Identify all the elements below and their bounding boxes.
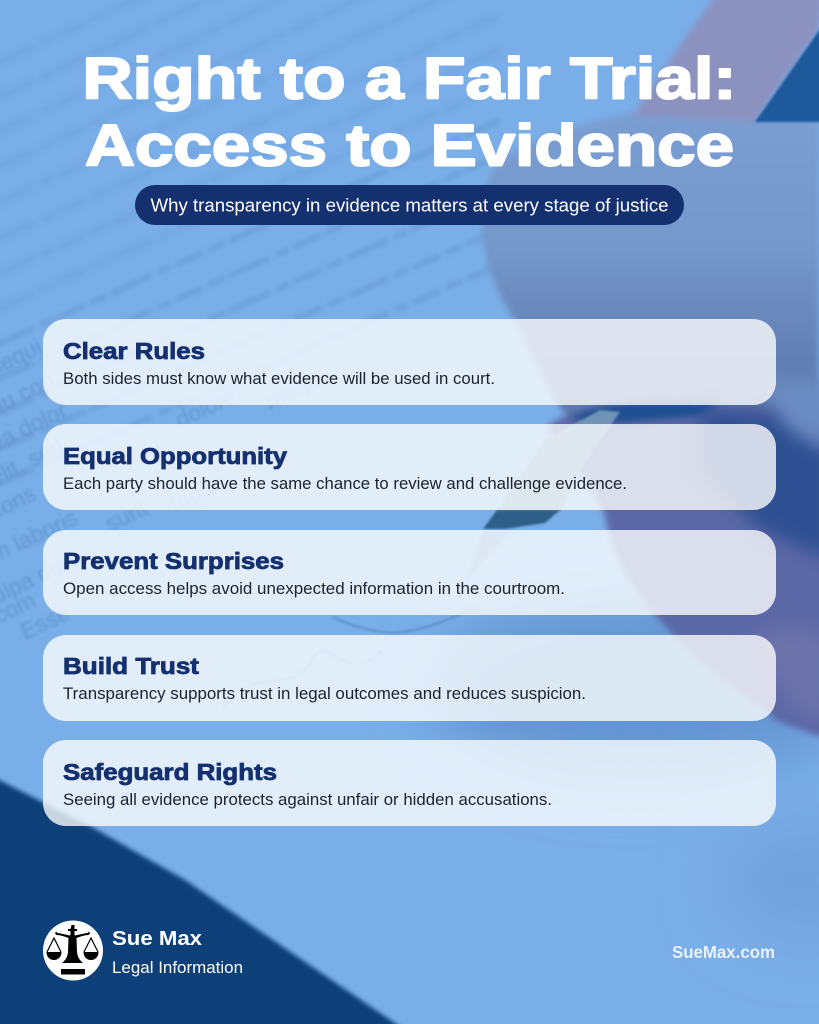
card: Build Trust [43, 635, 776, 721]
hand palm [482, 112, 819, 422]
card: Safeguard Rights: Seeing all evidence protects against unfair or hidden accusations. [63, 791, 552, 809]
pen tip [483, 510, 560, 529]
document text lines, near the pen [0, 333, 336, 645]
document text lines, near the pen: magna [261, 361, 336, 415]
card: Clear Rules: Both sides must know what evidence will be used in court. [63, 370, 495, 388]
brand name: Sue Max [112, 927, 203, 950]
card: Prevent Surprises: Open access helps avoid unexpected information in the courtroom. [63, 580, 565, 598]
finger [633, 0, 819, 122]
document text lines, near the pen: sunt [101, 494, 152, 537]
document text lines, near the pen: fugiat [166, 469, 229, 517]
card: Safeguard Rights [43, 740, 776, 826]
card: Clear Rules: Clear Rules [63, 338, 205, 364]
card: Equal Opportunity: Equal Opportunity [63, 443, 287, 469]
under-hand shadow [547, 402, 819, 740]
title: Access to Evidence [85, 114, 734, 178]
document text lines, near the pen: dolore [171, 382, 240, 433]
card: Equal Opportunity: Each party should have the same chance to review and challenge evidence. [63, 475, 627, 493]
document text lines, far and out of focus [0, 0, 500, 335]
card: Prevent Surprises: Prevent Surprises [63, 548, 284, 574]
subtitle pill: Why transparency in evidence matters at every stage of justice [150, 194, 668, 216]
card: Safeguard Rights: Safeguard Rights [63, 759, 277, 785]
signature [222, 606, 475, 712]
logo: scales of justice [43, 920, 103, 980]
title [82, 46, 736, 178]
card: Build Trust: Transparency supports trust in legal outcomes and reduces suspicion. [63, 685, 586, 703]
card: Equal Opportunity [43, 424, 776, 510]
website: SueMax.com [672, 942, 775, 962]
card: Build Trust: Build Trust [63, 653, 199, 679]
title: Right to a Fair Trial: [82, 46, 736, 112]
card: Prevent Surprises [43, 530, 776, 615]
card: Clear Rules [43, 319, 776, 405]
subtitle pill [135, 185, 684, 225]
dark triangle [0, 778, 402, 1024]
sleeve wedge [755, 22, 819, 122]
pen barrel [496, 410, 620, 512]
brand tagline: Legal Information [112, 959, 243, 977]
pen nib [466, 530, 512, 582]
document text lines, near the pen: Esse [16, 599, 73, 645]
